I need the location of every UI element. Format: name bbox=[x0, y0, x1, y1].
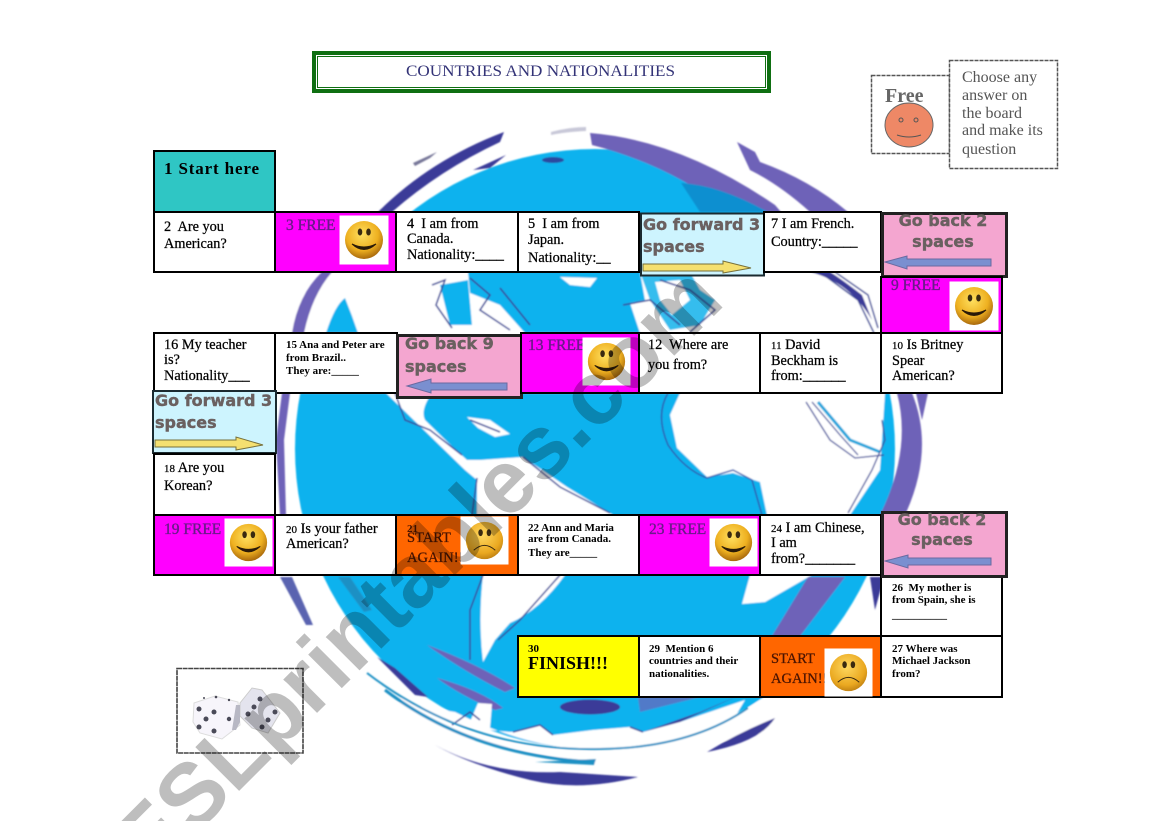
square 28 start again: AGAIN!! bbox=[771, 671, 827, 687]
square 7: Country:_____ bbox=[771, 234, 858, 250]
square 8 go back: Go back 2 bbox=[899, 211, 987, 230]
square 28 start again bbox=[760, 636, 881, 697]
square 4 bbox=[396, 212, 518, 272]
square 25 go back bbox=[882, 510, 1006, 576]
square 10: Spear bbox=[892, 353, 925, 369]
square 16 bbox=[154, 333, 275, 393]
square 5: Nationality:__ bbox=[528, 250, 611, 266]
square 24: from?_______ bbox=[771, 551, 856, 567]
square 6 go forward bbox=[641, 214, 764, 276]
square 16: Nationality___ bbox=[164, 368, 251, 384]
free rule card: Choose any bbox=[962, 69, 1037, 86]
square 24 bbox=[760, 515, 881, 575]
square 20: American? bbox=[286, 536, 349, 552]
square 29: 29 Mention 6 bbox=[649, 643, 714, 655]
square 23 free bbox=[639, 515, 760, 575]
square 2: 2 Are you bbox=[164, 219, 224, 235]
square 13 free bbox=[521, 333, 639, 393]
square 29: countries and their bbox=[649, 655, 738, 667]
square 25 go back: Go back 2 bbox=[898, 510, 986, 529]
square 12: you from? bbox=[648, 357, 707, 373]
square 11: from:______ bbox=[771, 368, 847, 384]
square 9 free bbox=[881, 277, 1002, 333]
square 3 free bbox=[275, 212, 396, 272]
square 4: Nationality:____ bbox=[407, 247, 505, 263]
square 24: I am bbox=[771, 535, 797, 551]
free rule card bbox=[872, 60, 1058, 168]
free rule card: question bbox=[962, 141, 1016, 158]
square 2 bbox=[154, 212, 275, 272]
title box bbox=[314, 53, 769, 91]
square 27 bbox=[881, 636, 1002, 697]
square 14 go back: Go back 9 bbox=[405, 334, 494, 353]
square 8 go back: spaces bbox=[912, 232, 974, 251]
square 14 go back: spaces bbox=[405, 357, 467, 376]
square 21 start again: AGAIN!! bbox=[407, 550, 463, 566]
square 25 go back: spaces bbox=[911, 530, 973, 549]
free rule card: the board bbox=[962, 105, 1022, 122]
square 19 free bbox=[154, 515, 275, 575]
square 22: They are_____ bbox=[528, 547, 598, 559]
globe background bbox=[276, 127, 928, 785]
square 10: 10 Is Britney bbox=[892, 337, 963, 353]
square 17 go forward bbox=[153, 391, 276, 453]
free rule card: answer on bbox=[962, 87, 1027, 104]
square 6 go forward: spaces bbox=[643, 237, 705, 256]
square 4: 4 I am from bbox=[407, 216, 478, 232]
square 27: from? bbox=[892, 668, 921, 680]
square 23 free: 23 FREE bbox=[649, 521, 706, 538]
free rule card: Free bbox=[885, 85, 924, 107]
square 18: Korean? bbox=[164, 478, 212, 494]
square 14 go back bbox=[398, 334, 522, 398]
square 26: 26 My mother is bbox=[892, 582, 972, 594]
square 10 bbox=[881, 333, 1002, 393]
square 13 free: 13 FREE bbox=[528, 337, 585, 354]
square 17 go forward: Go forward 3 bbox=[155, 391, 272, 410]
square 30 finish bbox=[518, 636, 639, 697]
square 21 start again: START bbox=[407, 530, 451, 546]
square 30 finish: 30 bbox=[528, 643, 540, 655]
square 15: They are:_____ bbox=[286, 365, 359, 377]
square 26 bbox=[881, 575, 1002, 636]
square 17 go forward: spaces bbox=[155, 413, 217, 432]
square 26: __________ bbox=[891, 609, 948, 621]
square 22 bbox=[518, 515, 639, 575]
square 16: 16 My teacher bbox=[164, 337, 247, 353]
square 22: are from Canada. bbox=[528, 533, 611, 545]
square 27: 27 Where was bbox=[892, 643, 958, 655]
square 4: Canada. bbox=[407, 231, 453, 247]
square 15: from Brazil.. bbox=[286, 352, 346, 364]
square 28 start again: START bbox=[771, 651, 815, 667]
square 16: is? bbox=[164, 352, 180, 368]
square 6 go forward: Go forward 3 bbox=[643, 215, 760, 234]
square 11: 11 David bbox=[771, 337, 820, 353]
square 21 start again bbox=[396, 515, 518, 575]
square 7 bbox=[764, 212, 881, 272]
square 15 bbox=[275, 333, 397, 393]
square 29: nationalities. bbox=[649, 668, 709, 680]
square 30 finish: FINISH!!! bbox=[528, 653, 608, 673]
square 11: Beckham is bbox=[771, 353, 839, 369]
free rule card: and make its bbox=[962, 122, 1043, 139]
square 9 free: 9 FREE bbox=[891, 277, 941, 294]
square 10: American? bbox=[892, 368, 955, 384]
square 21 start again: 21 bbox=[407, 523, 418, 535]
title box: COUNTRIES AND NATIONALITIES bbox=[406, 63, 675, 80]
square 20: 20 Is your father bbox=[286, 521, 378, 537]
square 15: 15 Ana and Peter are bbox=[286, 339, 385, 351]
square 12: 12 Where are bbox=[648, 337, 728, 353]
square 26: from Spain, she is bbox=[892, 594, 976, 606]
square 7: 7 I am French. bbox=[771, 216, 854, 232]
square 20 bbox=[275, 515, 396, 575]
square 19 free: 19 FREE bbox=[164, 521, 221, 538]
square 29 bbox=[639, 636, 760, 697]
square 27: Michael Jackson bbox=[892, 655, 971, 667]
square 18: 18 Are you bbox=[164, 460, 224, 476]
square 2: American? bbox=[164, 236, 227, 252]
square 1 start: 1 Start here bbox=[164, 159, 259, 178]
square 1 start bbox=[154, 151, 275, 212]
dice illustration bbox=[177, 668, 303, 753]
square 22: 22 Ann and Maria bbox=[528, 522, 614, 534]
square 18 bbox=[154, 454, 275, 515]
square 8 go back bbox=[882, 211, 1006, 276]
square 24: 24 I am Chinese, bbox=[771, 520, 865, 536]
square 11 bbox=[760, 333, 881, 393]
square 5: 5 I am from bbox=[528, 216, 599, 232]
square 12 bbox=[639, 333, 760, 393]
square 3 free: 3 FREE bbox=[286, 217, 336, 234]
square 5: Japan. bbox=[528, 232, 564, 248]
square 5 bbox=[518, 212, 639, 272]
